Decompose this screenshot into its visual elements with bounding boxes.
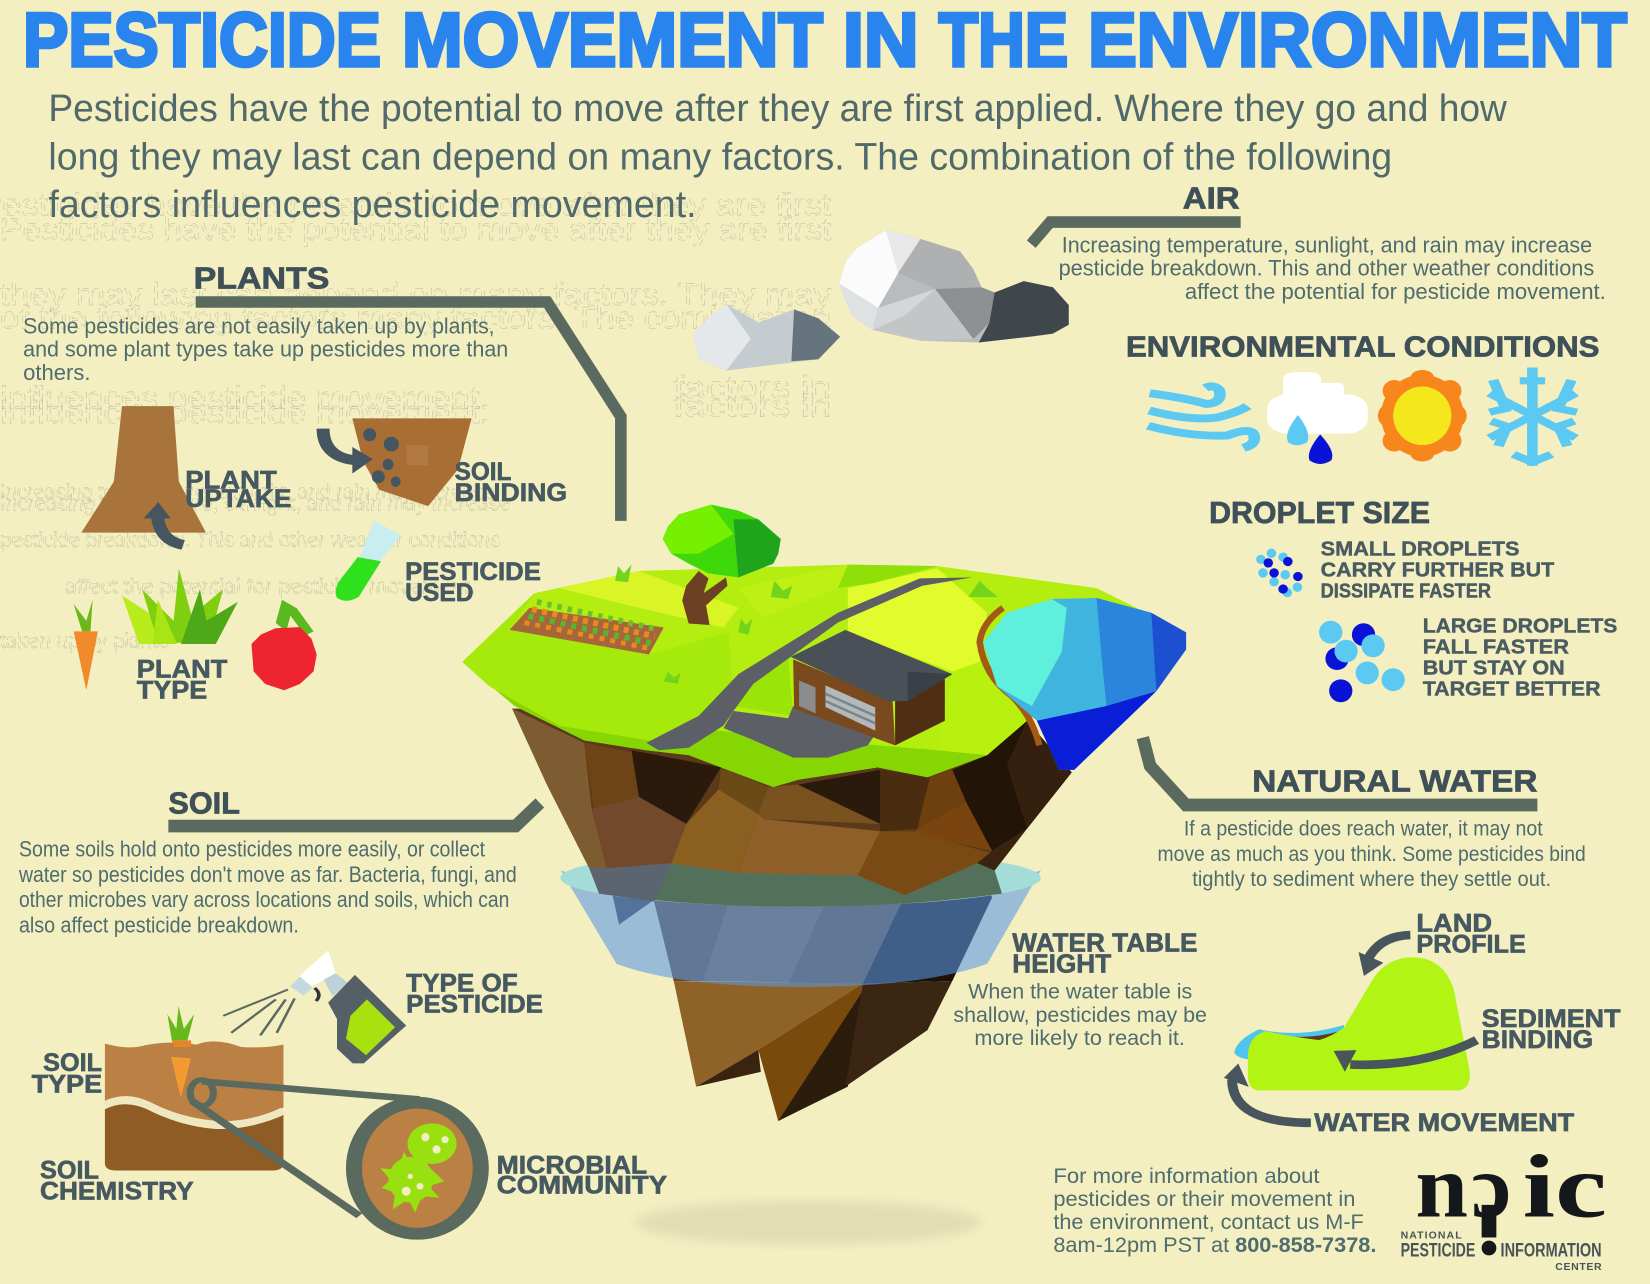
text: large droplets: TARGET BETTER	[1423, 679, 1601, 701]
illustration: soil diagram	[105, 950, 481, 1234]
icon: sun	[1378, 370, 1467, 461]
heading: water table height: HEIGHT	[1012, 948, 1111, 978]
leader line: soil	[168, 803, 540, 826]
text: small droplets: DISSIPATE FASTER	[1321, 581, 1492, 603]
ghost overprint text: factors in	[673, 388, 831, 424]
icon: tomato	[252, 600, 317, 690]
ghost overprint text: Pesticides have the potential to move after they are first	[0, 187, 832, 223]
text: water table: more likely to reach it.	[974, 1027, 1185, 1050]
arrow: water movement	[1224, 1063, 1311, 1123]
intro text: factors influences pesticide movement.	[48, 184, 697, 226]
title: THE	[939, 0, 1068, 83]
text: natural water	[1158, 818, 1586, 891]
ghost overprint text: Pesticides have the potential to move after they are first	[0, 211, 832, 247]
title: ENVIRONMENT	[1088, 0, 1627, 83]
text: air: Increasing temperature, sunlight, and rain may increase	[1062, 233, 1592, 258]
text: soil	[18, 837, 517, 937]
title: IN	[843, 0, 919, 83]
leader line: natural water	[1143, 738, 1537, 805]
label: type of pesticide	[406, 969, 543, 1018]
upper rock	[512, 708, 1072, 895]
illustration: land profile	[1224, 935, 1477, 1123]
label: pesticide used: USED	[405, 579, 474, 607]
text: natural water: tightly to sediment where they settle out.	[1192, 868, 1551, 891]
panel: water table	[953, 927, 1207, 1050]
icon: carrot	[74, 600, 98, 690]
text: large droplets: FALL FASTER	[1423, 636, 1570, 658]
heading: water table height: WATER TABLE	[1012, 927, 1198, 957]
contact text: the environment, contact us M-F	[1053, 1211, 1364, 1234]
intro text: Pesticides have the potential to move after they are first applied. Where they go and how	[48, 88, 1508, 130]
icons: environmental conditions	[1148, 368, 1577, 466]
heading: soil: SOIL	[168, 786, 240, 820]
ghost overprint text: they may last can depend on many factors. They may	[0, 276, 832, 312]
logo: npic: CENTER	[1555, 1261, 1602, 1273]
label: sediment binding: SEDIMENT	[1482, 1005, 1621, 1033]
leader line: plants	[196, 302, 621, 521]
panel: air	[1031, 181, 1606, 304]
text: air	[1059, 233, 1606, 304]
intro text: long they may last can depend on many factors. The combination of the following	[48, 136, 1392, 178]
logo: npic: INFORMATION	[1501, 1240, 1602, 1261]
text: large droplets: LARGE DROPLETS	[1423, 615, 1617, 637]
arrow: land profile	[1359, 935, 1410, 976]
ghost overprint text: Increasing temperature, sunlight, and rain may increase	[0, 492, 510, 515]
text: plants	[23, 314, 508, 385]
heading: plants: PLANTS	[194, 261, 329, 295]
title: PESTICIDE	[23, 0, 381, 83]
label: soil type: TYPE	[32, 1070, 102, 1098]
label: microbial community: MICROBIAL	[497, 1151, 647, 1179]
text: soil: also affect pesticide breakdown.	[19, 912, 299, 937]
label: plant uptake: UPTAKE	[185, 485, 291, 513]
label: plant type: PLANT	[137, 656, 228, 684]
icon: soil binding	[323, 418, 472, 506]
logo: npic: PESTICIDE	[1401, 1240, 1475, 1261]
icon: large droplets	[1319, 621, 1405, 702]
label: soil binding: BINDING	[455, 479, 567, 507]
icon: microbes	[380, 1123, 457, 1212]
heading: water table height	[1012, 927, 1198, 978]
heading: natural water: NATURAL WATER	[1252, 764, 1537, 798]
icon: sprayer	[223, 950, 406, 1063]
ghost overprint text: Increasing temperature, sunlight, and rain may increase	[0, 481, 495, 504]
label: microbial community: COMMUNITY	[497, 1171, 667, 1199]
text: natural water: move as much as you think. Some pesticides bind	[1158, 843, 1586, 866]
label: land profile: PROFILE	[1416, 930, 1526, 958]
magnifier	[190, 1080, 481, 1234]
label: land profile	[1416, 909, 1526, 958]
intro text	[48, 88, 1508, 226]
label: soil binding: SOIL	[455, 458, 511, 486]
label: soil chemistry: CHEMISTRY	[40, 1178, 194, 1206]
logo: npic: NATIONAL	[1401, 1230, 1462, 1242]
text: large droplets	[1423, 615, 1617, 701]
label: type of pesticide: TYPE OF	[406, 969, 518, 997]
soil block	[105, 1006, 283, 1171]
text: water table: shallow, pesticides may be	[953, 1004, 1207, 1027]
pond	[980, 598, 1186, 770]
ghost overprint text: influences pesticide movement.	[0, 394, 489, 430]
heading: droplet size: DROPLET SIZE	[1209, 496, 1430, 530]
label: land profile: LAND	[1416, 909, 1492, 937]
house	[791, 630, 952, 745]
text: water table	[953, 981, 1207, 1050]
label: soil chemistry	[40, 1157, 194, 1206]
logo: npic: n	[1415, 1135, 1468, 1236]
icon: small droplets	[1256, 549, 1303, 597]
icon: wind	[1148, 386, 1254, 448]
leader line: air	[1031, 222, 1241, 244]
road	[646, 577, 972, 750]
arrow: sediment binding	[1334, 1040, 1477, 1072]
ghost overprint text: affect the potential for pesticide movement.	[65, 575, 476, 598]
grass tufts	[615, 565, 998, 684]
text: large droplets: BUT STAY ON	[1423, 658, 1565, 680]
panel: land profile diagram	[1224, 909, 1621, 1137]
icon: small cloud	[693, 304, 840, 371]
label: soil binding	[455, 458, 567, 507]
label: microbial community	[497, 1151, 667, 1199]
panel: natural water	[1143, 738, 1586, 891]
text: soil: other microbes vary across locations and soils, which can	[19, 887, 509, 912]
label: water movement: WATER MOVEMENT	[1314, 1109, 1575, 1137]
label: type of pesticide: PESTICIDE	[406, 990, 543, 1018]
icon: grass clump	[122, 568, 238, 644]
title	[23, 0, 1627, 83]
text: small droplets: CARRY FURTHER BUT	[1321, 560, 1554, 582]
icon: tree stump with uptake arrow	[81, 406, 206, 545]
label: sediment binding	[1482, 1005, 1621, 1054]
text: plants: and some plant types take up pesticides more than	[23, 337, 508, 362]
text: soil: water so pesticides don't move as far. Bacteria, fungi, and	[18, 862, 517, 887]
text: air: pesticide breakdown. This and other weather conditions	[1059, 256, 1594, 281]
ghost overprint text: factors in	[673, 369, 831, 405]
label: pesticide used	[405, 558, 541, 607]
ghost overprint text: of the following factors many factors. The combination	[0, 299, 831, 335]
icon: test tube	[336, 520, 401, 601]
title: MOVEMENT	[402, 0, 823, 83]
text: air: affect the potential for pesticide movement.	[1185, 279, 1606, 304]
text: natural water: If a pesticide does reach water, it may not	[1184, 818, 1543, 841]
driveway	[723, 706, 878, 758]
text: small droplets: SMALL DROPLETS	[1321, 539, 1520, 561]
text: water table: When the water table is	[968, 981, 1192, 1004]
contact text: pesticides or their movement in	[1053, 1188, 1355, 1211]
vegetable field	[510, 602, 664, 654]
ghost overprint text	[0, 187, 832, 653]
panel: plants	[23, 261, 621, 705]
grass top	[462, 565, 1186, 787]
shadow under island	[635, 1201, 982, 1245]
tree	[663, 505, 781, 625]
text: soil: Some soils hold onto pesticides more easily, or collect	[19, 837, 485, 862]
icon: snowflake	[1490, 368, 1577, 466]
label: plant type	[137, 656, 228, 705]
label: soil type: SOIL	[43, 1049, 102, 1077]
text: small droplets	[1321, 539, 1554, 603]
logo: npic	[1401, 1135, 1607, 1273]
panel: droplet size	[1209, 496, 1617, 702]
label: soil type	[32, 1049, 102, 1098]
logo: npic: ɔ	[1471, 1135, 1511, 1236]
lower rock	[607, 863, 992, 1121]
contact text: 8am-12pm PST at 800-858-7378.	[1053, 1234, 1376, 1257]
icon: large cloud	[839, 230, 1069, 343]
label: sediment binding: BINDING	[1482, 1026, 1593, 1054]
heading: environmental conditions: ENVIRONMENTAL CONDITIONS	[1126, 332, 1599, 364]
illustration: floating island	[462, 505, 1186, 1121]
logo: npic: ic	[1523, 1135, 1607, 1236]
contact text: For more information about	[1053, 1165, 1320, 1188]
text: plants: Some pesticides are not easily taken up by plants,	[23, 314, 495, 339]
icon: cloud with rain	[1267, 372, 1368, 464]
label: soil chemistry: SOIL	[40, 1157, 99, 1185]
text: plants: others.	[23, 360, 91, 385]
panel: soil	[18, 786, 667, 1234]
label: plant type: TYPE	[137, 677, 207, 705]
ghost overprint text: taken up by plants	[0, 630, 168, 653]
heading: air: AIR	[1183, 181, 1240, 215]
label: plant uptake: PLANT	[185, 466, 277, 494]
water table cup	[560, 849, 1041, 987]
ghost overprint text: pesticide breakdown. This and other weather conditions	[0, 529, 500, 552]
contact text	[1053, 1165, 1376, 1257]
label: pesticide used: PESTICIDE	[405, 558, 541, 586]
label: plant uptake	[185, 466, 291, 513]
ghost overprint text: influences pesticide movement.	[0, 379, 489, 415]
